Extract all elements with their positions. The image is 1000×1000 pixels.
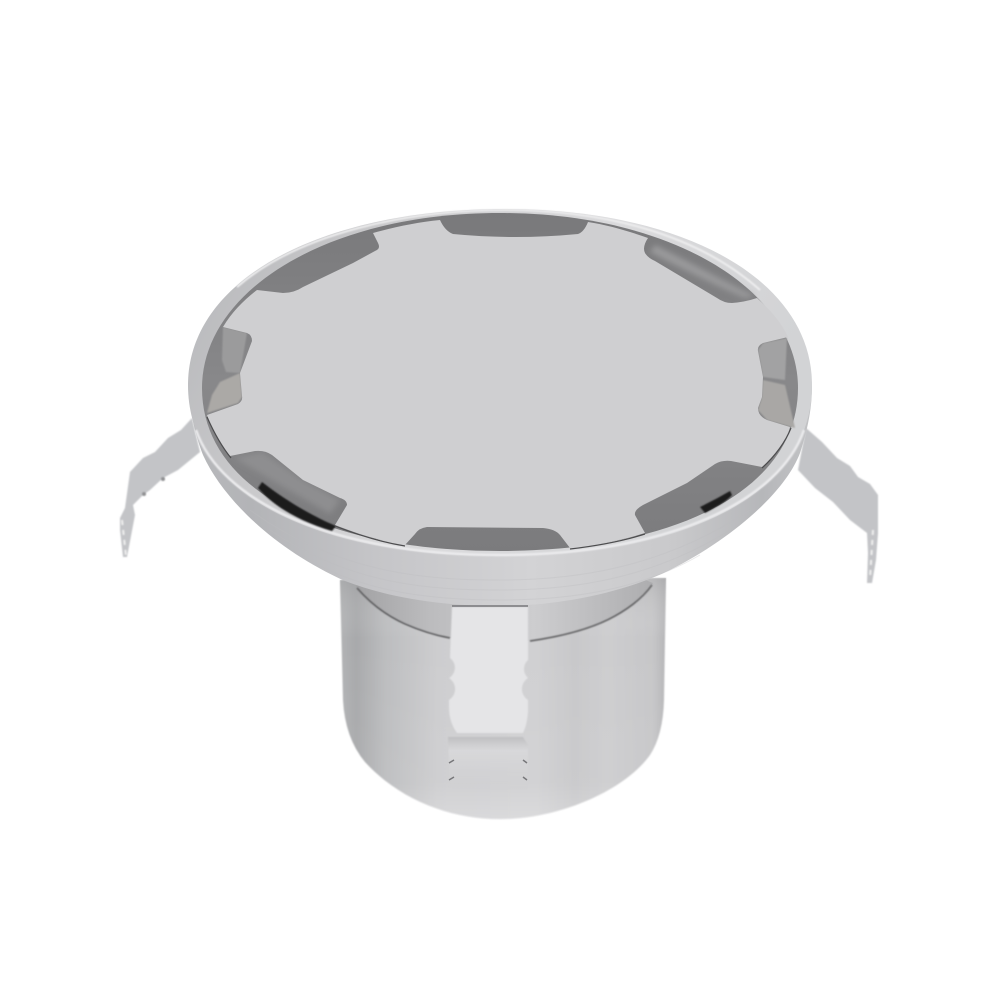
upper right notch lighter wall bbox=[758, 338, 787, 380]
lower right dark slot bbox=[700, 491, 732, 513]
cylindrical body bbox=[340, 578, 666, 819]
upper left notch lighter wall bbox=[222, 327, 247, 373]
lower left recess soft shading bbox=[235, 452, 340, 514]
brushed texture on flange bbox=[250, 510, 750, 600]
lower left dark slot bbox=[258, 482, 336, 531]
plate lower edge shadow bbox=[207, 417, 791, 549]
flange underside bbox=[188, 385, 812, 606]
top right notch soft shading bbox=[650, 245, 755, 298]
front retaining clip bbox=[448, 606, 528, 790]
rim highlight bbox=[237, 210, 760, 290]
recessed inner wall bbox=[202, 213, 798, 551]
neck ring under flange bbox=[356, 570, 653, 641]
centre plate with eight notches bbox=[207, 220, 790, 548]
front lip highlight bbox=[196, 430, 804, 555]
lighter reflection in left recess bbox=[207, 373, 242, 413]
outer rim top face bbox=[188, 209, 812, 556]
left spring clip bbox=[120, 418, 200, 557]
lighter reflection in right recess bbox=[758, 380, 795, 428]
right spring clip bbox=[798, 428, 878, 583]
